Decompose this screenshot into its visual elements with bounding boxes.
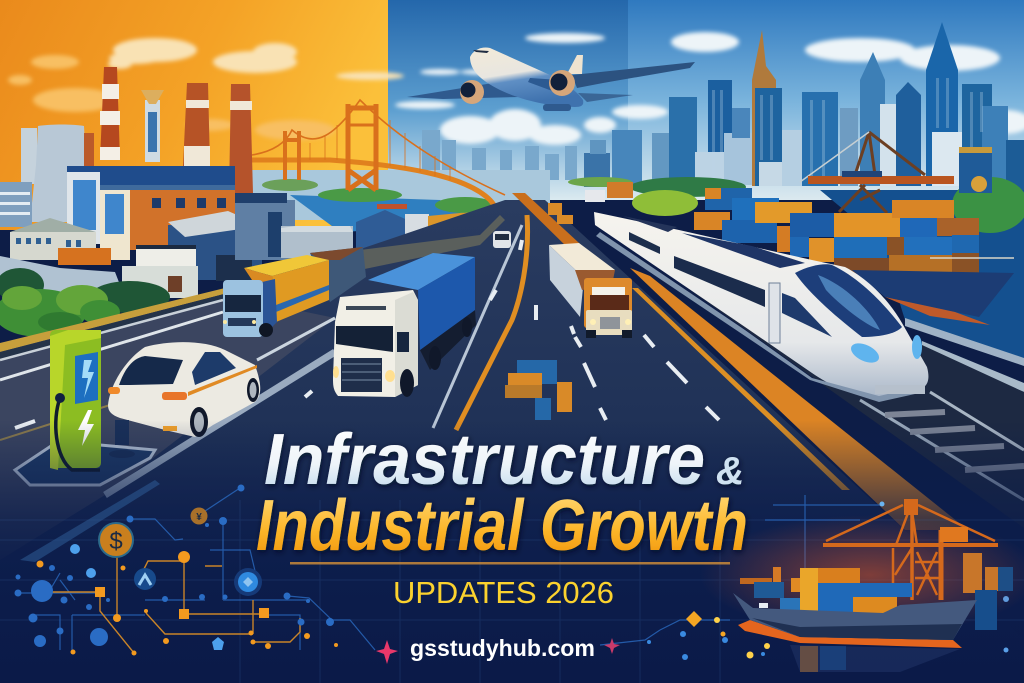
upper container ship <box>694 188 1014 325</box>
skyline: distant middle <box>422 130 577 180</box>
main building <box>67 166 235 236</box>
icon: dollar coin: $ <box>109 528 123 555</box>
guard rail <box>0 215 505 360</box>
icon: dollar coin <box>99 523 133 557</box>
port crane lower <box>823 499 1013 600</box>
title line 1: Infrastructure <box>264 420 705 500</box>
water under bridge <box>290 195 480 232</box>
network right <box>600 495 1009 660</box>
sky: orange left <box>0 0 388 230</box>
title divider <box>290 562 730 564</box>
icon: yen coin: ¥ <box>196 512 202 523</box>
EV charging station <box>15 330 155 485</box>
road diagonal stripe lower left <box>20 480 160 562</box>
sky: blue middle <box>388 0 628 200</box>
distant small vehicles <box>493 203 573 248</box>
hazy background under bridge <box>250 170 550 220</box>
grid lines <box>0 500 1024 683</box>
white car <box>108 342 260 437</box>
distant trailers <box>428 212 481 240</box>
skyline: city towers right <box>584 22 1024 190</box>
bottom dark fade panel <box>0 420 1024 683</box>
harbour tower <box>959 147 992 193</box>
clouds <box>8 32 1024 145</box>
orange cab truck centre <box>549 243 632 338</box>
grey warehouse <box>10 232 96 260</box>
icon: network node diamond <box>234 568 262 596</box>
railway tracks <box>690 290 1024 528</box>
annex blocks <box>0 256 122 295</box>
left block <box>0 182 32 227</box>
circuit network <box>14 484 398 664</box>
sunset glow behind port <box>700 515 1024 635</box>
icon: network node chevron <box>134 568 156 590</box>
chimneys <box>100 67 253 193</box>
left lanes grey surface <box>0 295 335 560</box>
sky: blue right <box>628 0 1024 200</box>
blue shed <box>168 225 262 280</box>
icon: pink spark <box>376 640 398 664</box>
roadside buildings <box>585 182 633 202</box>
tree band left <box>0 268 170 337</box>
cargo boxes on road <box>505 360 572 420</box>
yellow truck <box>223 247 366 337</box>
title line 2: Industrial Growth <box>256 486 748 566</box>
orange rail-side strips <box>512 193 968 530</box>
title line 1: & <box>716 450 744 493</box>
icon: node stars <box>70 544 224 650</box>
trees near port <box>568 177 1024 233</box>
lower container ship <box>733 567 997 672</box>
shrubs under bridge <box>262 179 495 213</box>
blue and white truck <box>333 253 476 397</box>
cooling towers <box>21 128 37 184</box>
tower block <box>235 200 295 260</box>
subtitle: UPDATES 2026 <box>393 575 614 610</box>
barrier rails right <box>905 318 1024 392</box>
website: gsstudyhub.com <box>410 635 595 661</box>
dock crane upper <box>800 132 954 213</box>
suspension bridge <box>252 100 505 245</box>
industrial complex <box>0 67 481 298</box>
blue stacked building <box>356 210 412 272</box>
icon: yen coin <box>190 508 208 524</box>
river water <box>820 190 1024 362</box>
bullet train <box>594 212 928 402</box>
airplane <box>407 47 695 111</box>
highway surface <box>0 200 1024 683</box>
road markings <box>0 215 719 495</box>
